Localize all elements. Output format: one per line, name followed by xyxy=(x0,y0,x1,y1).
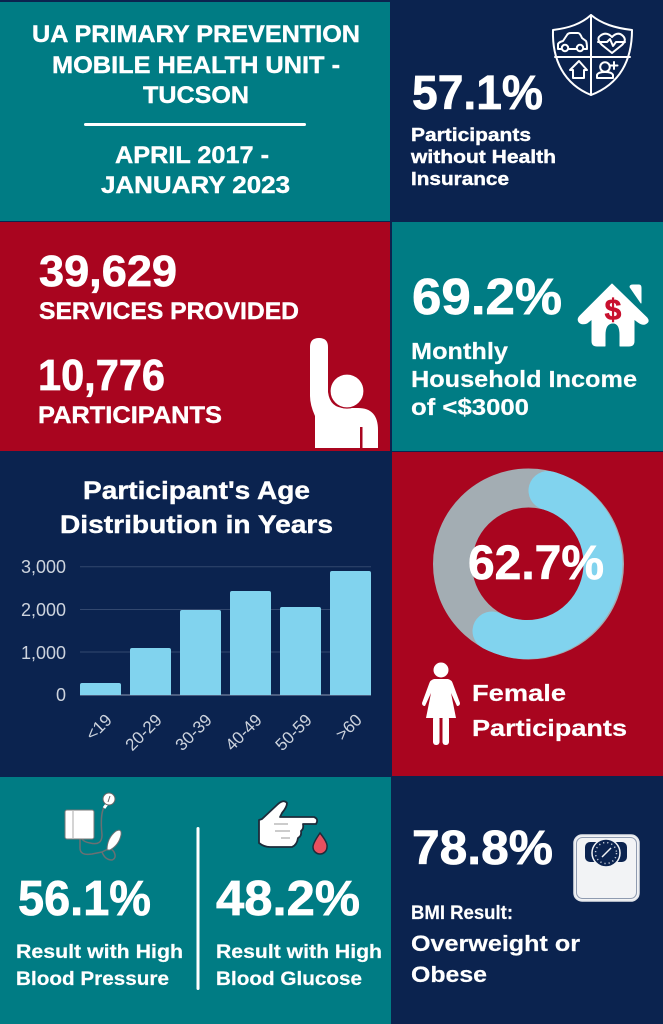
label: without insurance xyxy=(410,125,556,189)
label: without insurance: Participants xyxy=(411,125,531,145)
stat: high blood pressure: 56.1% xyxy=(18,872,151,926)
bar chart: 3,000 xyxy=(21,557,66,577)
stat: participants: 10,776 xyxy=(38,351,165,400)
bar chart: <19 xyxy=(82,710,116,744)
heading: age distribution: Distribution in Years xyxy=(60,511,333,539)
label: BMI result xyxy=(411,903,580,987)
stat: high blood glucose: Blood Glucose xyxy=(216,968,362,990)
heading: programme name: TUCSON xyxy=(143,82,249,109)
bar chart: 1,000 xyxy=(21,643,66,663)
label: without insurance: Insurance xyxy=(411,169,509,189)
panel: blood results xyxy=(0,777,391,1024)
label: monthly household income xyxy=(411,338,637,420)
label: BMI result: Obese xyxy=(411,962,487,987)
stat: 69.2 percent: 69.2% xyxy=(412,268,562,325)
label: female participants xyxy=(472,680,627,741)
stat: high blood pressure xyxy=(16,872,183,990)
bar chart: 20-29 xyxy=(122,710,166,755)
stat: services provided: SERVICES PROVIDED xyxy=(39,298,299,325)
stat: 78.8 percent: 78.8% xyxy=(412,822,553,875)
label: female participants: Participants xyxy=(472,715,627,741)
panel: services and participants xyxy=(0,222,390,451)
bar chart: 40-49 xyxy=(222,710,266,755)
heading: date range xyxy=(101,142,290,199)
label: monthly household income: of <$3000 xyxy=(411,394,529,420)
stat: services provided xyxy=(39,247,299,325)
stat: 62.7 percent: 62.7% xyxy=(468,537,604,590)
stat: services provided: 39,629 xyxy=(39,247,177,296)
icon: house with dollar: $ xyxy=(605,294,622,327)
icon: house with dollar xyxy=(578,284,648,346)
label: BMI result: BMI Result: xyxy=(411,903,513,924)
label: BMI result: Overweight or xyxy=(411,931,580,956)
panel: age distribution xyxy=(0,452,390,776)
icon: woman xyxy=(422,662,460,745)
stat: high blood glucose xyxy=(216,872,382,990)
heading: date range: APRIL 2017 - xyxy=(115,142,269,169)
panel: female participants xyxy=(392,452,663,776)
stat: participants xyxy=(38,351,222,429)
icon: shield xyxy=(553,15,632,95)
stat: 57.1 percent: 57.1% xyxy=(412,67,543,120)
panel: BMI xyxy=(392,777,663,1024)
heading: age distribution xyxy=(60,477,333,539)
bar chart: 2,000 xyxy=(21,600,66,620)
panel: title xyxy=(0,2,390,221)
label: monthly household income: Monthly xyxy=(411,338,508,364)
icon: bathroom scale xyxy=(574,835,639,901)
stat: high blood pressure: Blood Pressure xyxy=(16,968,169,990)
panel: household income xyxy=(392,222,663,451)
label: monthly household income: Household Income xyxy=(411,366,637,392)
stat: high blood glucose: Result with High xyxy=(216,941,382,963)
stat: participants: PARTICIPANTS xyxy=(38,402,222,429)
heading: age distribution: Participant's Age xyxy=(83,477,310,505)
heading: date range: JANUARY 2023 xyxy=(101,172,290,199)
icon: finger with blood drop xyxy=(259,801,327,854)
stat: high blood pressure: Result with High xyxy=(16,941,183,963)
donut chart xyxy=(452,488,604,640)
label: female participants: Female xyxy=(472,680,566,706)
label: without insurance: without Health xyxy=(410,147,556,167)
bar chart: 30-39 xyxy=(172,710,216,755)
stat: high blood glucose: 48.2% xyxy=(216,872,360,926)
bar chart xyxy=(21,557,371,755)
bar chart: 0 xyxy=(56,685,66,705)
heading: programme name xyxy=(32,21,360,109)
heading: programme name: UA PRIMARY PREVENTION xyxy=(32,21,360,48)
icon: blood pressure cuff xyxy=(65,793,121,860)
bar chart: >60 xyxy=(332,710,366,744)
heading: programme name: MOBILE HEALTH UNIT - xyxy=(52,52,340,79)
bar chart: 50-59 xyxy=(272,710,316,755)
icon: raised hand person xyxy=(310,338,378,448)
panel: health insurance xyxy=(392,0,663,221)
